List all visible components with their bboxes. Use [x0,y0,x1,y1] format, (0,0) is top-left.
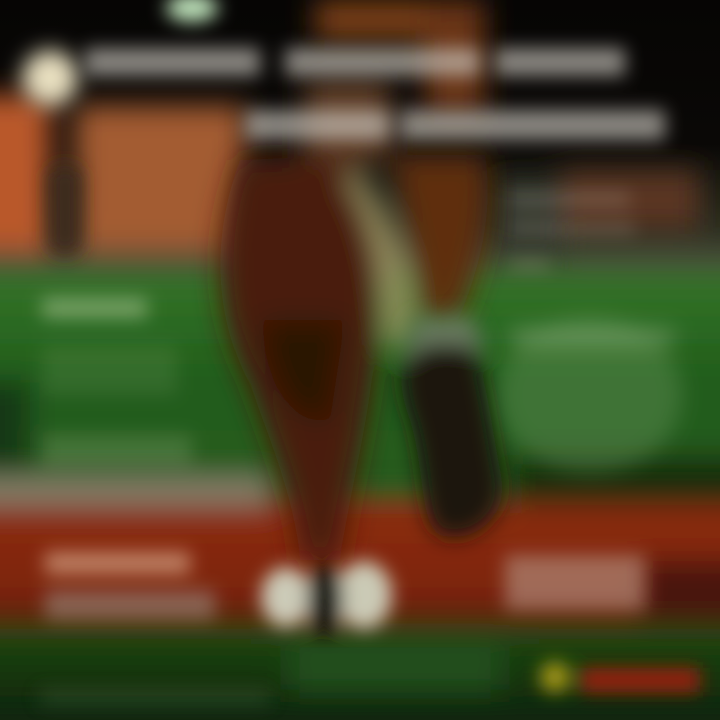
intro text block [510,192,635,270]
heading: lower left [42,435,192,465]
upper thighs [315,0,435,40]
body: upper left [42,345,177,395]
floodlight glow top left [22,50,78,106]
ball top [166,0,218,22]
player legs [220,0,488,560]
planted boots on ball [261,561,392,636]
near leg [220,155,378,560]
title: two lines of heading text [85,48,665,140]
heading: upper left [42,298,147,318]
panel: lower right text on track [505,555,645,610]
body: lower right [505,555,645,610]
panel: left text [42,298,192,465]
raised boot [401,316,502,537]
far leg [392,155,488,320]
panel background circle [498,317,682,473]
logo: yellow mark with red wordmark [540,662,700,692]
panel: right text [498,317,682,473]
footer text [40,690,270,704]
highlight on near leg [345,170,411,345]
panel: lower left text on track [45,552,215,620]
heading: lower left [45,552,190,574]
heading: right [510,328,675,344]
body: lower left [45,590,215,620]
distant figure [48,165,82,255]
